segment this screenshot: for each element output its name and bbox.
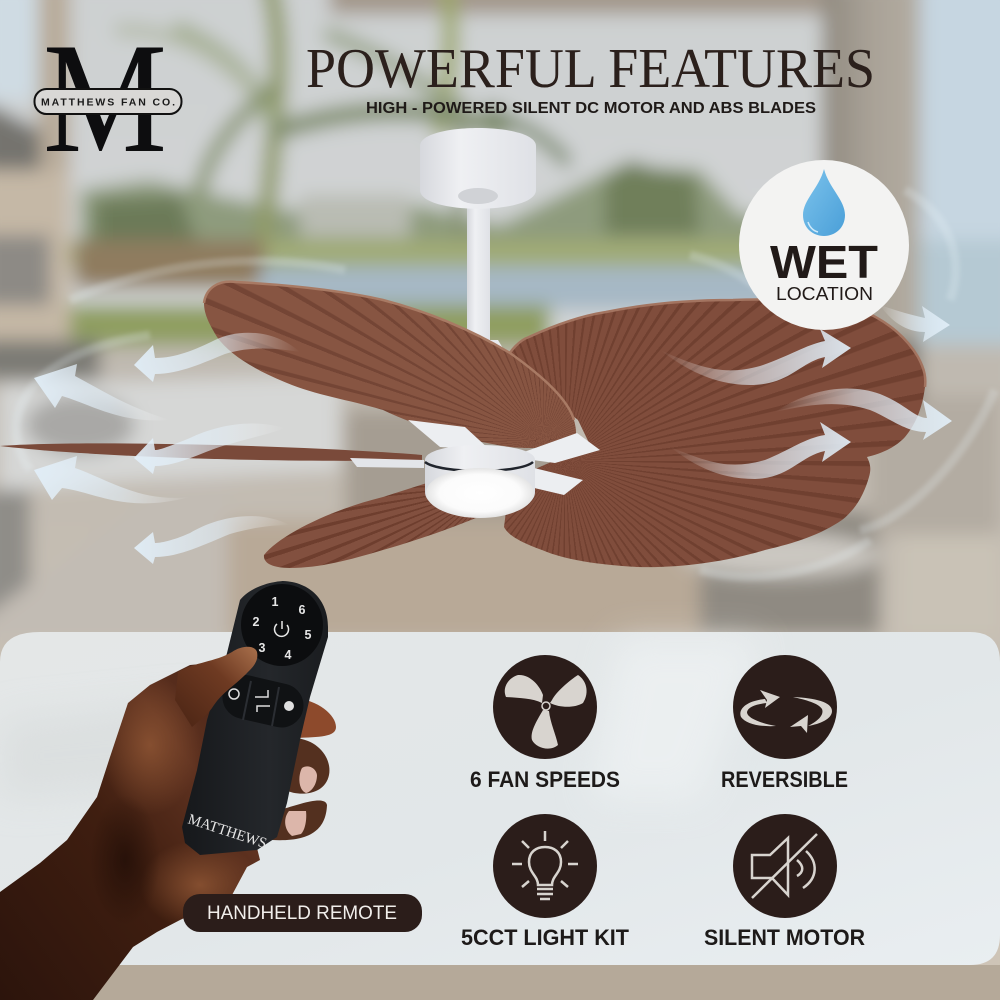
- icon: water drop: [803, 169, 845, 236]
- remote buttons: [218, 671, 308, 732]
- airflow arrow right 1: [660, 329, 851, 385]
- airflow arrow right 4 top: [880, 305, 950, 342]
- fan blade: lower left: [264, 484, 476, 568]
- feature: silent motor: [704, 814, 865, 950]
- airflow arrow left 1: [134, 333, 300, 382]
- logo: Matthews Fan Co.: MATTHEWS FAN CO.: [41, 96, 175, 108]
- panel: features background: [0, 632, 1000, 965]
- icon: reverse arrows: [740, 690, 832, 733]
- hand and arm: [0, 646, 260, 1000]
- feature: 6 fan speeds: [470, 655, 620, 792]
- remote brand text: MATTHEWS: [186, 812, 269, 852]
- feature: 5CCT light kit: [461, 814, 630, 950]
- subtitle: HIGH - POWERED SILENT DC MOTOR AND ABS BLADES: [366, 100, 816, 117]
- feature: reversible: [721, 655, 848, 792]
- icon: power button: [275, 621, 289, 636]
- pill label: handheld remote: HANDHELD REMOTE: [207, 903, 397, 924]
- fan blade: upper left: [203, 278, 581, 452]
- icon: fan: [505, 675, 587, 749]
- fingers: [272, 698, 336, 840]
- remote control body: 2: [253, 615, 260, 629]
- remote control body: 3: [259, 641, 266, 655]
- faint air swirl lines: [16, 190, 995, 577]
- remote control body: [182, 581, 328, 855]
- airflow arrows: [34, 305, 952, 564]
- airflow arrow left 2: [34, 364, 170, 421]
- feature: 5CCT light kit: 5CCT LIGHT KIT: [461, 925, 630, 950]
- remote control body: 6: [299, 603, 306, 617]
- fan blade: left, edge-on: [0, 443, 422, 461]
- airflow arrow left 4: [34, 456, 190, 503]
- feature: 6 fan speeds: 6 FAN SPEEDS: [470, 767, 620, 792]
- airflow arrow left 3: [134, 423, 285, 474]
- icon: muted speaker: [752, 834, 817, 898]
- fan canopy and downrod: [420, 128, 536, 360]
- airflow arrow right 2: [775, 388, 952, 440]
- fan blade: large right: [500, 296, 928, 572]
- feature: reversible: REVERSIBLE: [721, 767, 848, 792]
- fan motor, brackets and light: [350, 420, 600, 518]
- title: POWERFUL FEATURES: [306, 38, 875, 100]
- remote control body: 5: [305, 628, 312, 642]
- ceiling fan: [0, 128, 928, 572]
- thumb: [175, 647, 257, 727]
- icon: light bulb: [512, 831, 578, 899]
- bottom floor strip: [0, 965, 1000, 1000]
- hand holding remote: [0, 581, 336, 1000]
- airflow arrow left 5: [134, 516, 290, 564]
- remote control body: 4: [285, 648, 292, 662]
- feature: silent motor: SILENT MOTOR: [704, 925, 865, 950]
- badge: wet location: LOCATION: [776, 284, 873, 304]
- badge: wet location: WET: [770, 236, 878, 288]
- logo: Matthews Fan Co.: M: [43, 11, 167, 186]
- badge: wet location: [739, 160, 909, 330]
- remote control body: 1: [272, 595, 279, 609]
- pill label: handheld remote: [183, 894, 422, 932]
- airflow arrow right 3: [670, 422, 851, 479]
